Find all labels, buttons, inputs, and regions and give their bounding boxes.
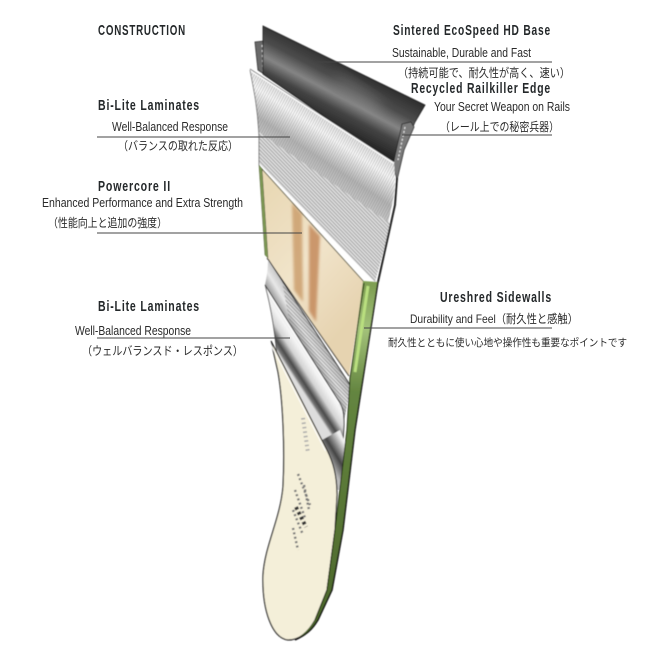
layer: lower bi-lite laminate — [264, 285, 344, 470]
label: powercore II: （性能向上と追加の強度） — [48, 215, 167, 230]
label: upper bi-lite laminates — [97, 97, 290, 153]
label: powercore II: Enhanced Performance and Extra Strength — [42, 196, 243, 210]
wood stringers — [292, 203, 320, 322]
heading: construction: CONSTRUCTION — [98, 22, 186, 39]
label: lower bi-lite laminates: Bi-Lite Laminates — [98, 298, 200, 315]
label: railkiller edge — [402, 80, 570, 135]
label: ureshred sidewalls — [364, 289, 627, 349]
label: ureshred sidewalls: Durability and Feel（耐久性と感触） — [410, 311, 578, 326]
label: sintered base: Sustainable, Durable and Fast — [392, 46, 531, 60]
label: lower bi-lite laminates — [75, 298, 290, 358]
label: railkiller edge: （レール上での秘密兵器） — [440, 120, 559, 134]
layer: metal edge rear left — [255, 41, 267, 76]
label: railkiller edge: Recycled Railkiller Edge — [411, 80, 551, 97]
layer: lower laminate striped — [265, 259, 350, 420]
label: upper bi-lite laminates: （バランスの取れた反応） — [118, 139, 238, 153]
layer: metal edge rear right — [393, 122, 414, 180]
label: upper bi-lite laminates: Bi-Lite Laminates — [98, 97, 200, 114]
label: upper bi-lite laminates: Well-Balanced Response — [112, 120, 228, 134]
label: sintered base: （持続可能で、耐久性が高く、速い） — [398, 65, 570, 80]
layer: ureshred sidewall — [295, 281, 378, 640]
layer: upper bi-lite laminate — [250, 69, 395, 282]
label: ureshred sidewalls: Ureshred Sidewalls — [440, 289, 552, 306]
label: powercore II: Powercore II — [98, 178, 171, 195]
layer: topsheet cream — [263, 341, 337, 640]
label: sintered base: Sintered EcoSpeed HD Base — [393, 22, 551, 39]
layer: sintered base — [263, 26, 425, 166]
layer: recycled railkiller edge side — [378, 178, 397, 282]
label: lower bi-lite laminates: Well-Balanced Response — [75, 324, 191, 338]
label: powercore II — [42, 178, 302, 233]
layer: powercore wood core — [259, 165, 364, 376]
topsheet logo graphic — [293, 418, 310, 550]
illustration: snowboard layers — [250, 26, 425, 640]
label: lower bi-lite laminates: （ウェルバランスド・レスポンス） — [82, 344, 243, 358]
layer: dark inner sheet — [322, 430, 346, 490]
label: railkiller edge: Your Secret Weapon on Rails — [434, 100, 570, 114]
label: ureshred sidewalls: 耐久性とともに使い心地や操作性も重要なポイントです — [388, 336, 627, 349]
label: sintered base — [315, 22, 570, 80]
